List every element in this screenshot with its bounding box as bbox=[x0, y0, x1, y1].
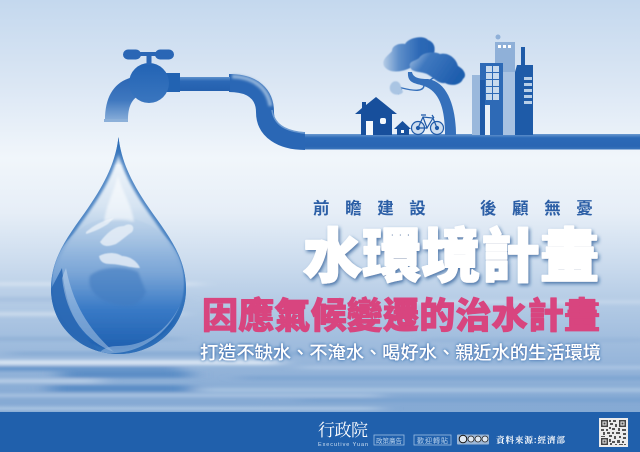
footer bar bbox=[0, 412, 640, 452]
drop edge shading bbox=[51, 137, 186, 354]
right tower bbox=[521, 47, 525, 65]
text: tagline: 前瞻建設 bbox=[313, 198, 441, 218]
faucet flange bbox=[166, 73, 180, 92]
icon: bicycle bbox=[412, 115, 444, 134]
tree trunk bbox=[408, 72, 456, 135]
text: tagline second part: 後顧無憂 bbox=[480, 198, 608, 218]
label: reposting welcome bbox=[414, 435, 451, 445]
label: policy ad: 政策廣告 bbox=[376, 436, 402, 445]
spout lip bbox=[104, 119, 128, 122]
small house bbox=[394, 121, 411, 135]
drop bottom reflection bbox=[51, 268, 100, 352]
icon: houses bbox=[355, 97, 411, 135]
logo: Executive Yuan: Executive Yuan bbox=[318, 442, 368, 448]
icon: water faucet and pipe bbox=[104, 50, 640, 150]
icon: water drop with globe bbox=[51, 137, 186, 354]
logo: Executive Yuan: 行政院 bbox=[318, 416, 368, 441]
title: 水環境計畫 bbox=[303, 224, 599, 290]
center building bbox=[480, 63, 503, 135]
continents bbox=[86, 218, 140, 268]
label: reposting welcome: 歡迎轉貼 bbox=[417, 436, 448, 445]
icon: QR code bbox=[599, 418, 628, 447]
icon: city buildings bbox=[472, 34, 533, 135]
back buildings bbox=[496, 34, 500, 40]
text: goals line: 打造不缺水、不淹水、喝好水、親近水的生活環境 bbox=[200, 343, 601, 363]
pipe bend bbox=[229, 76, 305, 141]
faucet handle bbox=[123, 50, 174, 65]
label: policy ad bbox=[374, 435, 404, 445]
globe bbox=[52, 234, 184, 347]
main pipe bbox=[304, 134, 640, 150]
africa landmass bbox=[88, 267, 146, 297]
icon: creative commons badge bbox=[457, 434, 489, 444]
large house bbox=[355, 97, 397, 135]
faucet spout bbox=[105, 76, 142, 120]
faucet body bbox=[129, 63, 169, 103]
subtitle: pink heading: 因應氣候變遷的治水計畫 bbox=[202, 295, 600, 336]
icon: tree bbox=[383, 37, 465, 135]
horizontal pipe bbox=[178, 77, 230, 91]
text: data source: 資料來源:經濟部 bbox=[496, 434, 565, 446]
tree canopies bbox=[383, 37, 435, 72]
